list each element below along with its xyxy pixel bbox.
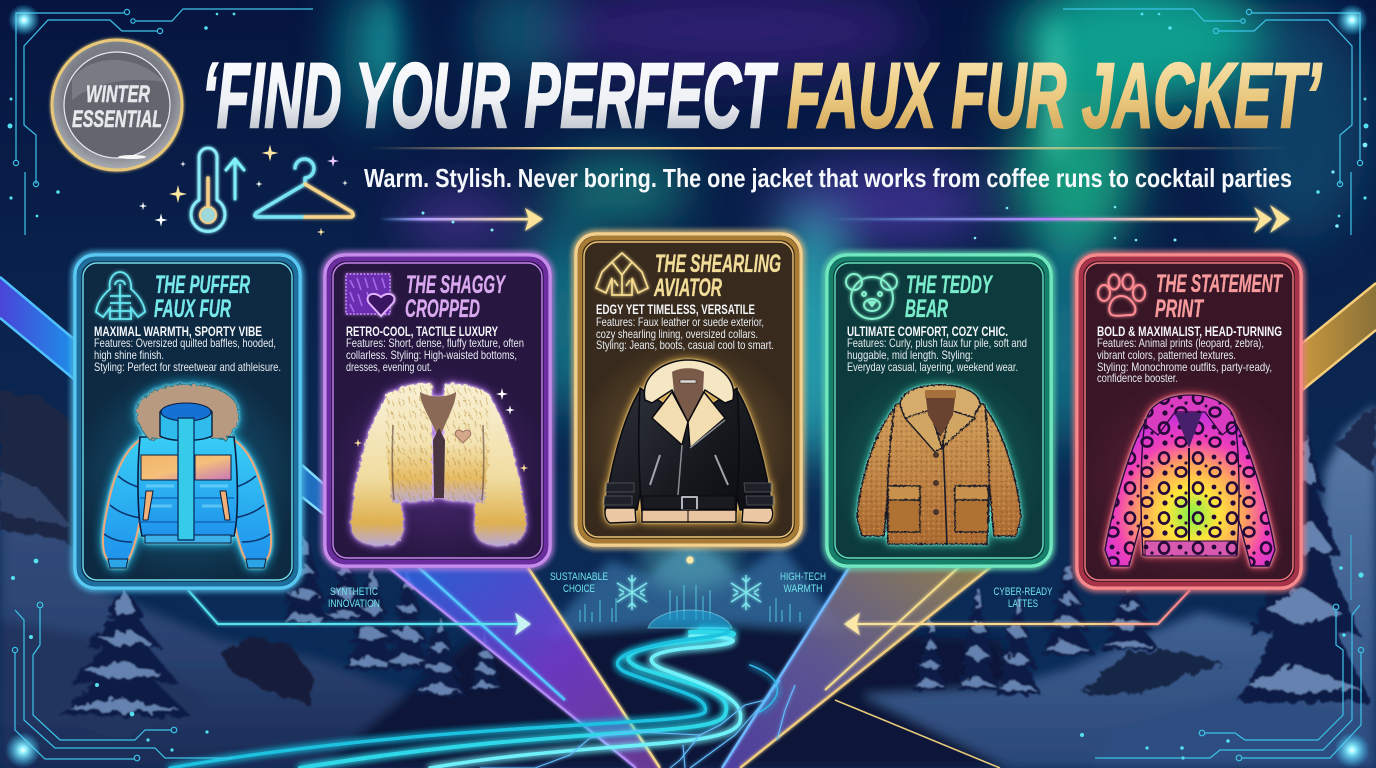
title: ‘FIND YOUR PERFECT [202,45,778,147]
icon: teddy bear face [846,274,897,319]
subheading: MAXIMAL WARMTH, SPORTY VIBE [94,324,262,339]
description [1097,336,1272,385]
sparkles around jacket [354,388,528,472]
label: sustainable choice: SUSTAINABLE [550,571,608,583]
lightning bolts [480,680,795,768]
description [346,336,524,374]
badge: winter essential: WINTER [86,81,150,108]
heading: the puffer faux fur: FAUX FUR [154,295,231,323]
circuit corner: bottom right [1080,535,1370,768]
description: collarless. Styling: High-waisted bottoms, [346,348,517,362]
heading: the statement print: THE STATEMENT [1156,270,1284,298]
circuit corner: bottom left [5,559,232,768]
icon: paw print [1098,274,1145,316]
arrow: short gold arrow [380,208,543,231]
arrow: left connector [188,590,530,634]
icon: thermometer with up arrow [191,148,244,231]
label: cyber-ready lattes: CYBER-READY [994,586,1053,598]
star field [422,143,1367,242]
description [596,315,774,352]
description: huggable, mid length. Styling: [847,348,973,362]
panel: the shaggy cropped [325,255,550,566]
icon: fur swatch with heart [346,274,394,316]
badge: winter essential [52,40,182,170]
description: Features: Animal prints (leopard, zebra), [1097,336,1264,350]
arrow: long double chevron arrow [830,205,1290,233]
description: vibrant colors, patterned textures. [1097,348,1236,362]
description: cozy shearling lining, oversized collars. [596,327,758,341]
icon: hanger [255,159,353,217]
converging beam from right cards [722,566,992,768]
heading: the teddy bear: BEAR [905,295,948,323]
description: Features: Oversized quilted baffles, hooded, [94,336,276,350]
description: dresses, evening out. [346,360,432,374]
badge: winter essential: ESSENTIAL [72,106,162,133]
description: Features: Faux leather or suede exterior, [596,315,764,329]
sparkles [139,145,348,236]
label: synthetic innovation: SYNTHETIC [330,586,378,598]
description: Features: Short, dense, fluffy texture, often [346,336,524,350]
label: high-tech warmth: HIGH-TECH [780,571,826,583]
converging beam from left cards [387,566,660,768]
heading: the shaggy cropped: CROPPED [405,295,480,323]
jacket: shaggy cream [351,383,526,545]
heading: the teddy bear: THE TEDDY [906,271,993,299]
description: Features: Curly, plush faux fur pile, soft and [847,336,1027,350]
description: Styling: Perfect for streetwear and athleisure. [94,360,281,374]
title underline [370,147,1290,149]
pine trees [59,427,1371,716]
heading: the puffer faux fur: THE PUFFER [155,271,250,299]
label: cyber-ready lattes: LATTES [1008,598,1038,610]
subheading: EDGY YET TIMELESS, VERSATILE [596,302,755,317]
label: high-tech warmth: WARMTH [784,583,823,595]
icon: puffer outline [96,272,145,319]
heading: the shearling aviator: THE SHEARLING [655,250,781,278]
jacket: rainbow leopard [1105,395,1275,566]
panel: the statement print [1077,255,1302,588]
jacket: black leather aviator [604,360,773,523]
subheading: RETRO-COOL, TACTILE LUXURY [346,324,498,339]
arrow: right connector [845,590,1190,634]
circuit corner: top right [1063,4,1368,235]
label: sustainable choice: CHOICE [563,583,595,595]
snowy mountains and slopes [0,392,1376,768]
left and right light beams [0,277,1376,516]
description: Styling: Monochrome outfits, party-ready, [1097,360,1272,374]
glowing winding river [170,628,778,768]
heading: the shearling aviator: AVIATOR [653,274,722,302]
description: high shine finish. [94,348,164,362]
heading: the statement print: PRINT [1155,295,1205,323]
subheading: ULTIMATE COMFORT, COZY CHIC. [847,324,1008,339]
description [94,336,281,374]
icon: snowflake right [731,575,761,610]
futuristic central hub [570,528,810,628]
label: synthetic innovation: INNOVATION [328,598,380,610]
icon: snowflake left [617,575,647,610]
circuit corner: top left [8,4,313,235]
panel: the teddy bear [827,255,1051,566]
subheading: BOLD & MAXIMALIST, HEAD-TURNING [1097,324,1282,339]
description: Everyday casual, layering, weekend wear. [847,360,1018,374]
jacket: teddy coat [857,385,1021,545]
icon: aviator jacket outline [596,253,648,295]
description: Styling: Jeans, boots, casual cool to smart. [596,338,774,352]
heading: the shaggy cropped: THE SHAGGY [406,271,506,299]
jacket: blue puffer [103,384,271,568]
panel: the puffer faux fur [72,255,302,588]
description: confidence booster. [1097,371,1178,385]
aurora borealis [344,0,1370,470]
description [847,336,1027,374]
panel: the shearling aviator [576,234,801,545]
